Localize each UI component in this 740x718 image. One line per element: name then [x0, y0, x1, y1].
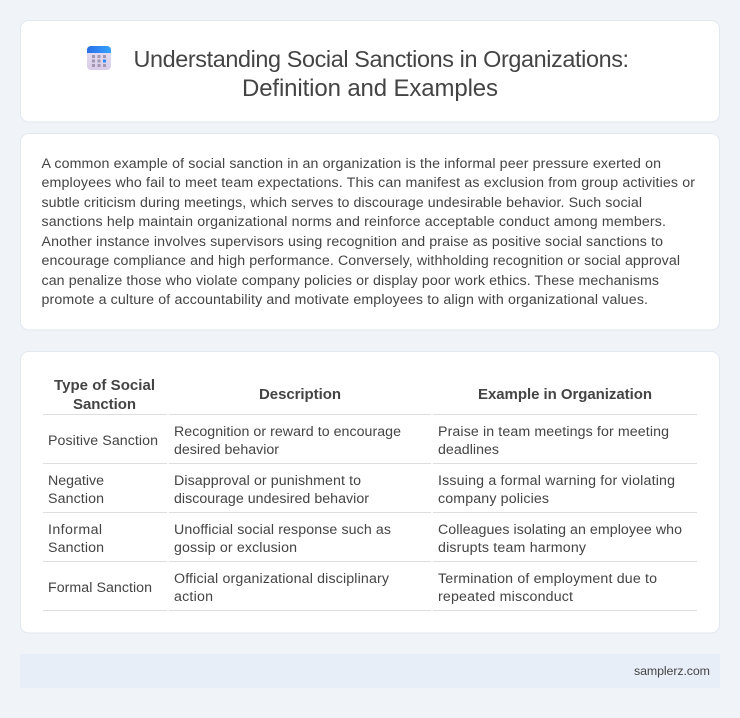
table header: Description	[259, 386, 341, 403]
table row: positive sanction: desired behavior	[174, 442, 279, 458]
panel: intro paragraph	[20, 134, 720, 330]
table row: negative sanction: discourage undesired behavior	[174, 491, 369, 507]
table header: Type of Social	[54, 377, 155, 394]
table row: negative sanction: Negative	[48, 473, 104, 489]
table row: positive sanction: Praise in team meetings for meeting	[438, 424, 669, 440]
footer source text: samplerz.com	[634, 664, 710, 678]
table row: negative sanction: company policies	[438, 491, 549, 507]
text block: paragraph: Another instance involves supervisors using recognition and praise as positive social sanctions to	[42, 234, 663, 250]
title: Definition and Examples	[242, 75, 498, 102]
table row: informal sanction	[48, 522, 682, 556]
table row: formal sanction: Formal Sanction	[48, 580, 152, 596]
panel: title card	[20, 20, 720, 122]
table row: informal sanction: Informal	[48, 522, 102, 538]
table row: negative sanction: Sanction	[48, 491, 104, 507]
table row: informal sanction: Sanction	[48, 540, 104, 556]
table row: positive sanction	[48, 424, 669, 458]
table header: Sanction	[73, 396, 136, 413]
table header	[54, 377, 652, 413]
table row: negative sanction	[48, 473, 675, 507]
table row: positive sanction: Recognition or reward to encourage	[174, 424, 401, 440]
text block: paragraph	[42, 156, 695, 308]
text block: paragraph: can penalize those who violate company policies or display poor work ethics. These mechanisms	[42, 273, 659, 289]
table row: positive sanction: Positive Sanction	[48, 433, 158, 449]
table header: Example in Organization	[478, 386, 652, 403]
text block: paragraph: encourage compliance and high performance. Conversely, withholding recognition or social approval	[42, 253, 680, 269]
table row: positive sanction: deadlines	[438, 442, 499, 458]
footer bar	[20, 654, 720, 688]
icon: calendar	[87, 46, 111, 70]
table row: formal sanction: action	[174, 589, 213, 605]
text block: paragraph: A common example of social sanction in an organization is the informal peer pressure exerted on	[42, 156, 661, 172]
table row: formal sanction: Official organizational disciplinary	[174, 571, 390, 587]
table row: negative sanction: Issuing a formal warning for violating	[438, 473, 675, 489]
text block: paragraph: subtle criticism during meetings, which serves to discourage undesirable behavior. Such social	[42, 195, 642, 211]
table row: formal sanction: repeated misconduct	[438, 589, 573, 605]
table row: formal sanction	[48, 571, 657, 605]
panel: sanctions table	[20, 352, 720, 633]
table row: negative sanction: Disapproval or punishment to	[174, 473, 361, 489]
table row: informal sanction: disrupts team harmony	[438, 540, 587, 556]
table row: informal sanction: gossip or exclusion	[174, 540, 297, 556]
title: Understanding Social Sanctions in Organizations:	[134, 46, 629, 72]
table row: informal sanction: Colleagues isolating an employee who	[438, 522, 682, 538]
text block: paragraph: sanctions help maintain organizational norms and reinforce acceptable conduct among members.	[42, 214, 666, 230]
table row: formal sanction: Termination of employment due to	[438, 571, 657, 587]
table row: informal sanction: Unofficial social response such as	[174, 522, 391, 538]
text block: paragraph: promote a culture of accountability and motivate employees to align with organizational values.	[42, 292, 648, 308]
text block: paragraph: employees who fail to meet team expectations. This can manifest as exclusion from group activities or	[42, 175, 695, 191]
title	[134, 46, 629, 102]
